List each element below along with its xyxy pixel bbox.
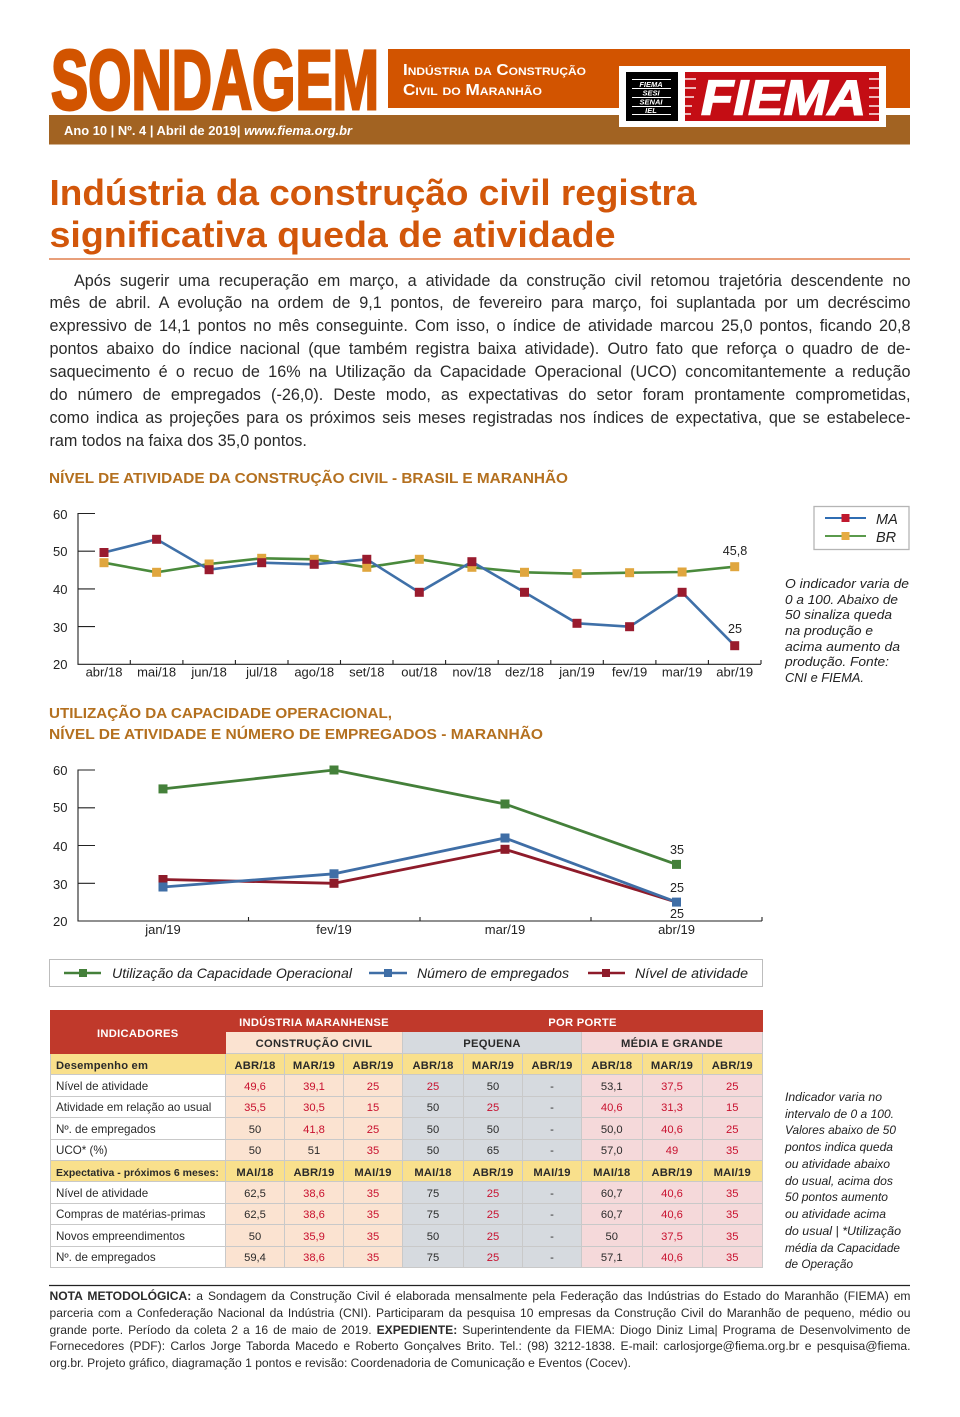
x axis labels: fev/19 xyxy=(316,922,352,937)
data table: UCO* (%) xyxy=(56,1144,108,1157)
data table: - xyxy=(550,1102,554,1114)
methodological note xyxy=(50,1289,910,1370)
data table: 35,9 xyxy=(303,1230,325,1242)
data table: 35 xyxy=(367,1145,379,1157)
data table: MAR/19 xyxy=(293,1060,335,1072)
note: table: média da Capacidade xyxy=(785,1241,900,1255)
data table: 50 xyxy=(427,1124,439,1136)
intro paragraph: expressivo de 14,1 pontos no mês conseguinte. Com isso, o índice de atividade marcou 25,0 pontos, ficando 20,8 xyxy=(50,317,910,335)
intro paragraph xyxy=(50,272,910,450)
title: significativa queda de atividade xyxy=(50,214,616,255)
data table: 75 xyxy=(427,1209,439,1221)
data labels: 45,8 xyxy=(723,544,747,558)
FIEMA logo xyxy=(619,66,886,127)
data table: 37,5 xyxy=(661,1080,683,1092)
data table: ABR/19 xyxy=(652,1167,692,1179)
data table: CONSTRUÇÃO CIVIL xyxy=(256,1038,372,1050)
data table: ABR/19 xyxy=(352,1060,394,1072)
data table: 38,6 xyxy=(303,1252,325,1264)
x axis labels: mar/19 xyxy=(662,664,702,680)
methodological note: grande porte. Período da coleta 2 a 16 de maio de 2019. EXPEDIENTE: Superintendente da FIEMA: Diogo Diniz Lima| Programa de Desenvolvimento de xyxy=(50,1323,910,1337)
masthead word: SONDAGEM: SONDAGEM xyxy=(51,33,379,127)
note: table: ou atividade acima xyxy=(785,1207,886,1221)
data table: 35 xyxy=(367,1188,379,1200)
line chart: atividade Brasil e Maranhão xyxy=(53,507,761,680)
note: chart 1: 0 a 100. Abaixo de xyxy=(785,592,898,607)
data table: 39,1 xyxy=(303,1080,325,1092)
data table: INDICADORES xyxy=(97,1028,179,1040)
y axis labels: 20 xyxy=(53,657,67,672)
data table: 59,4 xyxy=(244,1252,266,1264)
data table: 25 xyxy=(427,1080,439,1092)
data table: POR PORTE xyxy=(548,1017,617,1029)
x axis labels: set/18 xyxy=(349,664,385,680)
data table: 30,5 xyxy=(303,1102,325,1114)
data table: 50 xyxy=(427,1102,439,1114)
x axis labels: fev/19 xyxy=(612,664,647,680)
note: table: do usual | *Utilização xyxy=(785,1224,901,1238)
data table: - xyxy=(550,1209,554,1221)
data table: 35 xyxy=(367,1252,379,1264)
intro paragraph: ram todos na faixa dos 35,0 pontos. xyxy=(50,432,307,450)
intro paragraph: pontos abaixo do índice nacional (que também registra baixa atividade). Outro fato que reforça o quadro de de- xyxy=(50,340,910,358)
intro paragraph: saquecimento é o recuo de 16% na Utilização da Capacidade Operacional (UCO) concomitantemente a redução xyxy=(50,363,910,381)
data table: 37,5 xyxy=(661,1230,683,1242)
data table: - xyxy=(550,1080,554,1092)
data table: MAR/19 xyxy=(651,1060,693,1072)
data table: - xyxy=(550,1230,554,1242)
data table: 35 xyxy=(367,1209,379,1221)
data table xyxy=(50,1010,763,1268)
data table: ABR/19 xyxy=(712,1060,753,1072)
note: table: do usual, acima dos xyxy=(785,1174,893,1188)
data table: 38,6 xyxy=(303,1188,325,1200)
data labels: 25 xyxy=(670,907,684,921)
x axis labels: jan/19 xyxy=(144,922,181,937)
note: table: pontos indica queda xyxy=(784,1140,893,1154)
FIEMA logo: SESI xyxy=(642,88,660,98)
data labels: 25 xyxy=(670,881,684,895)
data table: 75 xyxy=(427,1188,439,1200)
line chart: UCO, empregados e atividade xyxy=(53,763,762,937)
data table: Compras de matérias-primas xyxy=(56,1208,205,1221)
banner subtitle: Indústria da Construção xyxy=(403,62,586,79)
data table: 49 xyxy=(666,1145,678,1157)
methodological note: org.br. Projeto gráfico, diagramação 1 pontos e revisão: Coordenadoria de Comunicação e Eventos (Cocev). xyxy=(50,1356,631,1370)
series MA xyxy=(100,535,739,650)
data table: ABR/18 xyxy=(412,1060,454,1072)
data table: Desempenho em xyxy=(56,1060,148,1072)
heading: chart 2: UTILIZAÇÃO DA CAPACIDADE OPERACIONAL, xyxy=(49,704,392,722)
x axis labels xyxy=(86,664,753,680)
title: Indústria da construção civil registra xyxy=(50,172,697,213)
y axis labels: 30 xyxy=(53,620,67,635)
legend: chart 1: BR xyxy=(876,530,897,546)
data table: MAR/19 xyxy=(472,1060,514,1072)
legend: chart 2: Nível de atividade xyxy=(635,965,748,981)
data table: - xyxy=(550,1252,554,1264)
data table: 40,6 xyxy=(661,1124,683,1136)
data table: ABR/19 xyxy=(472,1167,514,1179)
x axis labels: jan/19 xyxy=(558,664,595,680)
data table: 40,6 xyxy=(661,1188,683,1200)
note: chart 1: O indicador varia de xyxy=(785,576,909,591)
intro paragraph: mês de abril. A evolução na ordem de 9,1 pontos, de fevereiro para março, foi suplantada por um decréscimo xyxy=(50,294,910,312)
data table: 62,5 xyxy=(244,1188,266,1200)
data table: MAI/18 xyxy=(236,1167,274,1179)
data table: 60,7 xyxy=(601,1209,623,1221)
data table: 57,0 xyxy=(601,1145,623,1157)
note: table: Indicador varia no xyxy=(785,1090,882,1104)
data table: MAI/18 xyxy=(414,1167,452,1179)
x axis labels: jul/18 xyxy=(245,664,277,680)
data table: 31,3 xyxy=(661,1102,683,1114)
data table: 65 xyxy=(487,1145,499,1157)
note: chart 1: 50 sinaliza queda xyxy=(785,607,892,622)
data table: 25 xyxy=(367,1080,379,1092)
x axis labels: mar/19 xyxy=(485,922,525,937)
y axis labels: 60 xyxy=(53,507,67,522)
legend: chart 2 xyxy=(50,960,762,986)
x axis labels: nov/18 xyxy=(452,664,491,680)
data table: 35 xyxy=(726,1145,738,1157)
data table: 53,1 xyxy=(601,1080,623,1092)
data table: 49,6 xyxy=(244,1080,266,1092)
data table: ABR/19 xyxy=(532,1060,572,1072)
methodological note: Fornecedores (PDF): Carlos Jorge Taborda Macedo e Roberto Gonçalves Brito. Tel.: (98) 3212-1838. E-mail: carlosjorge@fiema.org.br e pesquisa@fiema. xyxy=(50,1339,910,1353)
y axis labels: 30 xyxy=(53,877,67,892)
data table: Nº. de empregados xyxy=(56,1251,156,1264)
data table: 60,7 xyxy=(601,1188,623,1200)
data table: 50 xyxy=(487,1080,499,1092)
data table: 25 xyxy=(487,1102,499,1114)
heading: chart 2 xyxy=(49,704,543,743)
y axis labels: 40 xyxy=(53,582,67,597)
data table: Atividade em relação ao usual xyxy=(56,1101,211,1114)
FIEMA logo: SENAI xyxy=(640,98,663,106)
data table: 25 xyxy=(487,1252,499,1264)
data table: 50,0 xyxy=(601,1124,623,1136)
data table: 25 xyxy=(487,1188,499,1200)
data table: 50 xyxy=(427,1145,439,1157)
data table: MAI/19 xyxy=(533,1167,571,1179)
data table: MAI/19 xyxy=(714,1167,751,1179)
FIEMA logo: IEL xyxy=(645,106,657,115)
y axis labels: 50 xyxy=(53,800,67,815)
data table: MAI/19 xyxy=(354,1167,392,1179)
x axis labels: dez/18 xyxy=(505,664,544,680)
data labels xyxy=(670,843,684,921)
heading: chart 2: NÍVEL DE ATIVIDADE E NÚMERO DE EMPREGADOS - MARANHÃO xyxy=(49,725,543,743)
note: table: de Operação xyxy=(785,1257,853,1271)
data table: 15 xyxy=(726,1102,738,1114)
data table: 40,6 xyxy=(661,1252,683,1264)
y axis labels xyxy=(53,507,67,672)
note: table: 50 pontos aumento xyxy=(785,1190,888,1204)
data table: 50 xyxy=(249,1124,261,1136)
note: table: ou atividade abaixo xyxy=(785,1157,890,1171)
heading: chart 1: NÍVEL DE ATIVIDADE DA CONSTRUÇÃO CIVIL - BRASIL E MARANHÃO xyxy=(49,469,568,487)
x axis labels: mai/18 xyxy=(137,664,176,680)
data table: 35 xyxy=(726,1188,738,1200)
note: chart 1: na produção e xyxy=(785,623,873,638)
title xyxy=(50,172,697,255)
note: table: Valores abaixo de 50 xyxy=(785,1123,896,1137)
data table: ABR/19 xyxy=(294,1167,334,1179)
data table: 38,6 xyxy=(303,1209,325,1221)
data table: 51 xyxy=(308,1145,320,1157)
data table: 40,6 xyxy=(601,1102,623,1114)
x axis labels: abr/19 xyxy=(658,922,695,937)
data table: PEQUENA xyxy=(463,1038,521,1050)
banner subtitle xyxy=(403,62,586,99)
data table: Expectativa - próximos 6 meses: xyxy=(56,1167,219,1179)
series nível de atividade xyxy=(158,845,676,902)
issue text: Ano 10 | Nº. 4 | Abril de 2019| www.fiema.org.br xyxy=(64,124,353,138)
data table: 40,6 xyxy=(661,1209,683,1221)
data table: Nº. de empregados xyxy=(56,1122,156,1136)
note: table: intervalo de 0 a 100. xyxy=(785,1107,894,1121)
FIEMA logo: FIEMA xyxy=(701,72,866,126)
data table: Nível de atividade xyxy=(56,1080,148,1092)
intro paragraph: como indica as projeções para os próximos seis meses registradas nos índices de expectativa, que se estabelece- xyxy=(50,409,910,427)
y axis labels: 40 xyxy=(53,839,67,854)
data table: 35 xyxy=(726,1209,738,1221)
methodological note: parceria com a Confederação Nacional da Indústria (CNI). Participaram da pesquisa 10 empresas da Construção Civil do Maranhão de pequeno, médio ou xyxy=(50,1306,910,1320)
data table: 50 xyxy=(487,1124,499,1136)
banner subtitle: Civil do Maranhão xyxy=(403,82,542,99)
note: chart 1: acima aumento da xyxy=(785,639,900,654)
data table: MAI/18 xyxy=(593,1167,630,1179)
data table: 57,1 xyxy=(601,1252,623,1264)
data table: 25 xyxy=(726,1124,738,1136)
data labels: 25 xyxy=(728,622,742,636)
legend: chart 1 xyxy=(814,506,909,550)
data table: Nível de atividade xyxy=(56,1186,148,1200)
x axis labels: abr/19 xyxy=(716,664,753,680)
issue strip xyxy=(49,115,910,144)
data table: 35,5 xyxy=(244,1102,266,1114)
series empregados xyxy=(158,834,681,907)
data table: 50 xyxy=(249,1145,261,1157)
x axis labels: abr/18 xyxy=(86,664,122,680)
data table: 25 xyxy=(726,1080,738,1092)
data table: - xyxy=(550,1124,554,1136)
data table: 50 xyxy=(606,1230,618,1242)
x axis labels: out/18 xyxy=(401,664,437,680)
data table: 25 xyxy=(367,1124,379,1136)
data table: - xyxy=(550,1145,554,1157)
series BR xyxy=(100,554,739,578)
methodological note: NOTA METODOLÓGICA: a Sondagem da Construção Civil é elaborada mensalmente pela Federação das Indústrias do Estado do Maranhão (FIEMA) em xyxy=(50,1289,910,1303)
note: chart 1: CNI e FIEMA. xyxy=(785,670,864,685)
note: table xyxy=(784,1090,901,1271)
data table: - xyxy=(550,1188,554,1200)
x axis labels: ago/18 xyxy=(294,664,334,680)
data table: 41,8 xyxy=(303,1124,325,1136)
legend: chart 2: Número de empregados xyxy=(417,965,569,981)
data table: 25 xyxy=(487,1230,499,1242)
data table: MÉDIA E GRANDE xyxy=(621,1038,723,1050)
data table: INDÚSTRIA MARANHENSE xyxy=(239,1017,389,1029)
data table: 62,5 xyxy=(244,1209,266,1221)
orange banner xyxy=(388,49,910,108)
data table: 35 xyxy=(726,1252,738,1264)
legend: chart 1: MA xyxy=(876,512,898,528)
data table: 15 xyxy=(367,1102,379,1114)
data table: 50 xyxy=(249,1230,261,1242)
note: chart 1: produção. Fonte: xyxy=(784,654,889,669)
x axis labels xyxy=(144,922,695,937)
note: chart 1 xyxy=(784,576,909,685)
data table: ABR/18 xyxy=(234,1060,276,1072)
data table: 35 xyxy=(726,1230,738,1242)
y axis labels xyxy=(53,763,67,929)
intro paragraph: do número de empregados (-26,0). Deste modo, as expectativas do setor foram prontamente comprometidas, xyxy=(50,386,910,404)
data table: 35 xyxy=(367,1230,379,1242)
intro paragraph: Após sugerir uma recuperação em março, a atividade da construção civil retomou trajetória descendente no xyxy=(74,272,910,290)
y axis labels: 20 xyxy=(53,914,67,929)
data table: ABR/18 xyxy=(591,1060,632,1072)
legend: chart 2: Utilização da Capacidade Operacional xyxy=(112,965,353,981)
data labels xyxy=(723,544,747,636)
x axis labels: jun/18 xyxy=(190,664,227,680)
masthead xyxy=(49,33,910,144)
data table: Novos empreendimentos xyxy=(56,1230,185,1242)
data table: 25 xyxy=(487,1209,499,1221)
data table: 75 xyxy=(427,1252,439,1264)
data labels: 35 xyxy=(670,843,684,857)
FIEMA logo: FIEMA xyxy=(639,80,663,89)
y axis labels: 50 xyxy=(53,544,67,559)
data table: 50 xyxy=(427,1230,439,1242)
y axis labels: 60 xyxy=(53,763,67,778)
series UCO xyxy=(158,766,681,869)
